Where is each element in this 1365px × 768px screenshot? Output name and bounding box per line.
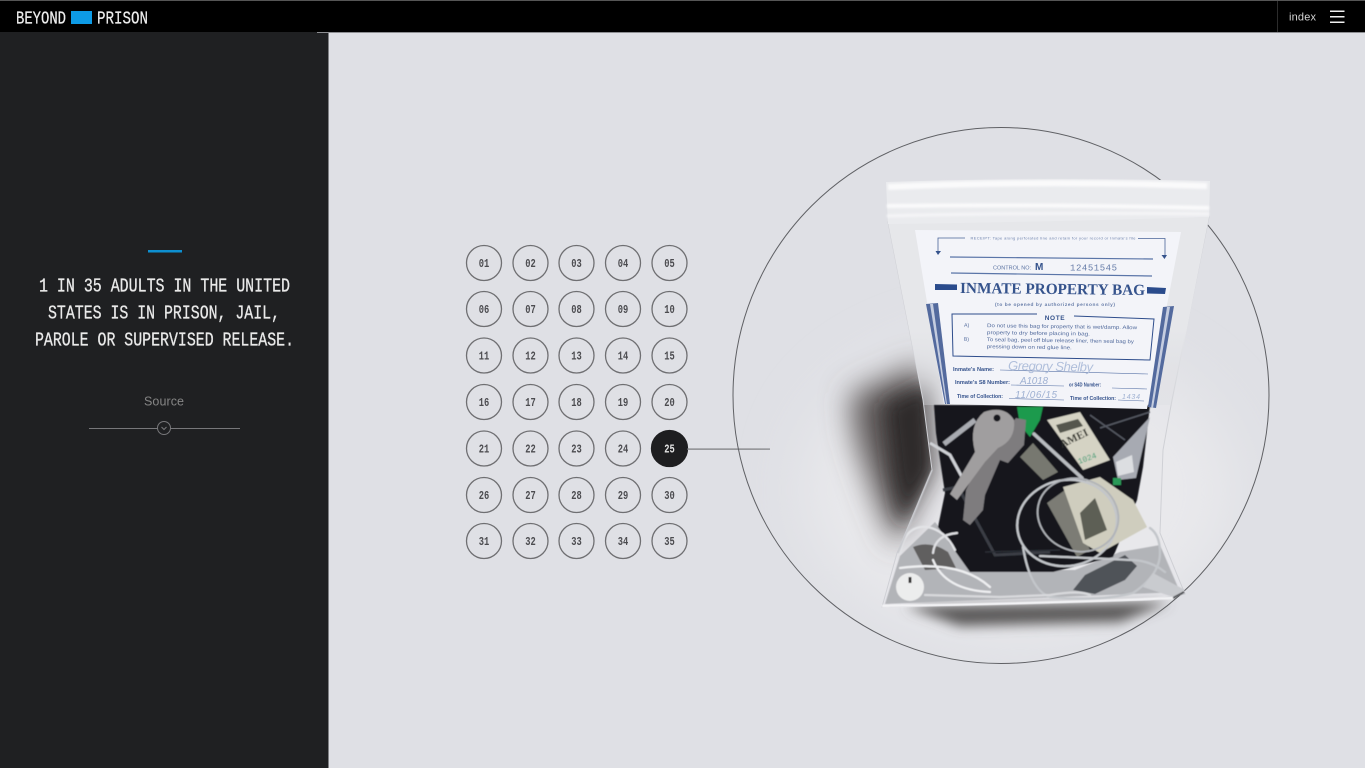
number grid: 1 in 35: 07: [525, 304, 536, 317]
number grid: 1 in 35: 02: [525, 258, 536, 271]
main background: [328, 32, 1365, 768]
note box: Do not use this bag for property that is wet/damp. Allow: [987, 323, 1137, 331]
folded banknotes: [1020, 412, 1147, 557]
control number: [993, 262, 1117, 274]
plastic streaks over the wallet: [930, 443, 962, 477]
light halo behind the photo: [834, 419, 1206, 578]
number grid: 1 in 35: 23: [571, 444, 582, 456]
headline statement: PAROLE OR SUPERVISED RELEASE.: [35, 330, 294, 352]
metal pin: [1034, 434, 1082, 478]
inmate details form: or S4D Number:: [1069, 382, 1101, 388]
top navigation bar: [0, 0, 1365, 33]
number grid: 1 in 35: 04: [618, 258, 628, 271]
note box: A): [964, 323, 970, 329]
headline statement: 1 IN 35 ADULTS IN THE UNITED: [39, 276, 290, 298]
number grid: 1 in 35: 22: [525, 444, 536, 456]
number grid: 1 in 35: 09: [618, 304, 628, 317]
grey items at bag bottom: [913, 544, 956, 570]
control number: M: [1035, 262, 1043, 273]
number grid: 1 in 35: 06: [479, 304, 489, 317]
grey floor of the bag under the contents: [885, 522, 1180, 604]
number grid: 1 in 35: 10: [664, 304, 675, 317]
number grid: 1 in 35: 27: [525, 490, 536, 503]
number grid: 1 in 35: 19: [618, 397, 628, 410]
control number: 12451545: [1070, 264, 1117, 274]
headline statement: [35, 276, 294, 352]
headline statement: STATES IS IN PRISON, JAIL,: [48, 302, 280, 324]
number grid: 1 in 35: 20: [664, 397, 675, 410]
green key tag: [1017, 407, 1043, 437]
number grid: 1 in 35: 24: [618, 444, 628, 456]
plastic corner at bottom right: [1143, 573, 1185, 597]
number grid: 1 in 35: 30: [664, 490, 675, 503]
inmate details form: Inmate's S8 Number:: [955, 380, 1010, 386]
index link: index: [1289, 12, 1316, 24]
bag contents: [882, 405, 1185, 606]
number grid: 1 in 35: 18: [571, 397, 582, 410]
folded banknotes: AMEI: [1058, 427, 1090, 451]
card title: [935, 280, 1166, 308]
number grid: 1 in 35: 08: [571, 304, 582, 317]
note box: [952, 314, 1154, 360]
foil wrapper: [1113, 417, 1150, 480]
number grid: 1 in 35: 01: [479, 258, 489, 271]
inmate details form: 1434: [1122, 394, 1140, 401]
number grid: 1 in 35: 25: [664, 444, 675, 456]
note box: property to dry before placing in bag.: [987, 330, 1090, 338]
earphone cables: [900, 467, 1165, 599]
source label: Source: [144, 394, 184, 408]
zip seal strip: [886, 179, 1210, 224]
number grid: 1 in 35: 31: [479, 536, 489, 549]
receipt instruction and arrows: RECEIPT: Tape along perforated line and retain for your record or Inmate's file: [970, 236, 1136, 240]
property card: [915, 230, 1181, 409]
control number: CONTROL NO:: [993, 266, 1031, 272]
number grid: 1 in 35: 17: [525, 397, 536, 410]
number grid: 1 in 35: 13: [571, 350, 582, 364]
number grid: 1 in 35: 05: [664, 258, 675, 271]
accent dash: [148, 250, 182, 252]
logo: PRISON: [97, 8, 148, 30]
inmate details form: Time of Collection:: [1070, 396, 1116, 402]
note box: To seal bag, peel off blue release liner, then seal bag by: [987, 337, 1134, 345]
source slider control: [89, 422, 240, 434]
number grid: 1 in 35: 15: [664, 350, 675, 364]
number grid: 1 in 35: 12: [525, 350, 536, 364]
icon: hamburger menu: [1330, 10, 1344, 23]
number grid: 1 in 35: 35: [664, 536, 675, 549]
number grid: 1 in 35: 33: [571, 536, 582, 549]
sidebar panel: [0, 32, 328, 768]
number grid: 1 in 35: 28: [571, 490, 582, 503]
number grid: 1 in 35: 34: [618, 536, 628, 549]
number grid: 1 in 35: [466, 246, 688, 558]
receipt instruction and arrows: [936, 236, 1167, 276]
inmate details form: [953, 358, 1148, 402]
number grid: 1 in 35: 26: [479, 490, 489, 503]
number grid: 1 in 35: 32: [525, 536, 536, 549]
earbud: [896, 573, 924, 601]
large photo circle outline: [733, 128, 1269, 664]
inmate details form: 11/06/15: [1015, 390, 1057, 401]
keys: [950, 410, 1026, 525]
card title: (to be opened by authorized persons only): [995, 302, 1115, 308]
inmate details form: A1018: [1019, 376, 1048, 387]
card title: INMATE PROPERTY BAG: [960, 280, 1145, 299]
black wallet and dark mass: [934, 405, 1150, 572]
inmate details form: Gregory Shelby: [1008, 358, 1095, 375]
photo: inmate property bag: [850, 179, 1210, 626]
number grid: 1 in 35: 11: [479, 350, 489, 364]
upper plastic backing behind the card: [888, 217, 1209, 405]
number grid: 1 in 35: 14: [618, 350, 628, 364]
bag cast shadow: [850, 362, 1170, 626]
plastic bag body: [882, 217, 1209, 607]
note box: B): [964, 337, 969, 343]
logo: [16, 8, 148, 30]
folded banknotes: 1024: [1077, 452, 1098, 467]
side stripes: [926, 303, 1174, 408]
number grid: 1 in 35: 16: [479, 397, 489, 410]
number grid: 1 in 35: 29: [618, 490, 628, 503]
note box: NOTE: [1045, 315, 1065, 322]
connector line from 25 to photo: [687, 448, 770, 450]
inmate details form: Inmate's Name:: [953, 367, 994, 373]
number grid: 1 in 35: 03: [571, 258, 582, 271]
logo: BEYOND: [16, 8, 66, 30]
inmate details form: Time of Collection:: [957, 394, 1003, 400]
number grid: 1 in 35: 21: [479, 444, 489, 456]
note box: pressing down on red glue line.: [987, 344, 1072, 351]
